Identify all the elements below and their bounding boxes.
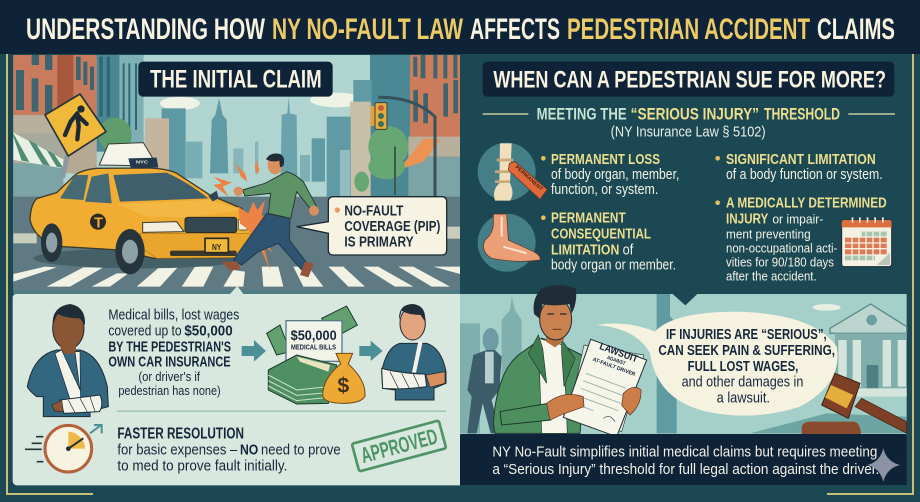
icon: pedestrian crossing sign xyxy=(45,94,106,178)
text: permanent consequential limitation: LIMITATION xyxy=(551,242,619,258)
illustration: yellow taxi xyxy=(30,143,253,274)
illustration: lawsuit document: AGAINST xyxy=(606,355,627,367)
title bar: PEDESTRIAN ACCIDENT xyxy=(567,13,810,46)
text: medically determined injury xyxy=(715,196,887,284)
text: medically determined injury: or impair- xyxy=(772,211,823,226)
text: permanent loss: function, or system. xyxy=(551,182,658,198)
illustration: recovered person xyxy=(382,304,446,400)
illustration: yellow taxi: NY xyxy=(212,243,222,252)
trees xyxy=(98,118,408,195)
text: permanent consequential limitation: PERMANENT xyxy=(551,211,626,227)
panel: no-fault benefits xyxy=(13,286,460,485)
illustration: yellow taxi: T xyxy=(94,215,103,231)
speech bubble with damages text: CAN SEEK PAIN & SUFFERING, xyxy=(658,343,835,359)
illustration: lawsuit document: LAWSUIT xyxy=(598,341,639,365)
text: coverage details xyxy=(108,306,239,398)
text: coverage details: BY THE PEDESTRIAN'S xyxy=(108,338,231,355)
illustration: background figure xyxy=(467,328,502,433)
subheading: serious injury threshold: “SERIOUS INJURY” xyxy=(631,104,759,123)
speech bubble with damages text: and other damages in xyxy=(682,375,803,391)
text: medically determined injury: ment preventing xyxy=(726,226,811,241)
illustration: lawsuit document xyxy=(547,339,647,437)
text: coverage details: OWN CAR INSURANCE xyxy=(108,354,231,371)
text: permanent loss xyxy=(541,152,679,198)
title bar: UNDERSTANDING HOW xyxy=(26,13,265,46)
text: medically determined injury: non-occupational acti- xyxy=(726,240,837,255)
text: coverage details: $50,000 xyxy=(184,322,233,339)
icon: sparkle xyxy=(867,448,900,482)
illustration: lawsuit document: AT-FAULT DRIVER xyxy=(592,357,636,378)
stamp: approved: APPROVED xyxy=(358,424,440,468)
text: medically determined injury: vities for 90/180 days xyxy=(726,255,834,270)
crosswalk stripes xyxy=(13,267,460,287)
subheading: serious injury threshold: THRESHOLD xyxy=(764,104,840,123)
panel: lawsuit scene and summary xyxy=(460,285,907,485)
right buildings xyxy=(327,55,460,233)
text: medically determined injury: A MEDICALLY DETERMINED xyxy=(726,196,887,212)
callout: no-fault coverage: COVERAGE (PIP) xyxy=(344,219,440,235)
speech bubble with damages text: IF INJURIES ARE “SERIOUS”, xyxy=(666,327,827,343)
heading: the initial claim: THE INITIAL CLAIM xyxy=(150,65,322,93)
text: permanent loss: PERMANENT LOSS xyxy=(551,152,660,168)
arrow: to recovery xyxy=(359,341,383,361)
icon: spine with permanent tag xyxy=(478,143,547,201)
awnings xyxy=(13,133,441,170)
subheading: serious injury threshold: MEETING THE xyxy=(537,104,627,123)
subheading: serious injury threshold: (NY Insurance Law § 5102) xyxy=(611,125,766,141)
street xyxy=(13,197,460,290)
text: permanent loss: of body organ, member, xyxy=(551,167,679,183)
callout: no-fault coverage: IS PRIMARY xyxy=(344,235,414,251)
text: permanent consequential limitation xyxy=(541,211,676,273)
summary bar: NY No-Fault simplifies initial medical claims but requires meeting xyxy=(492,445,877,461)
callout: no-fault coverage: NO-FAULT xyxy=(344,203,403,219)
callout: no-fault coverage xyxy=(297,197,447,255)
illustration: yellow taxi: NYC xyxy=(136,160,148,165)
traffic light xyxy=(371,97,435,197)
text: coverage details: covered up to xyxy=(108,322,182,339)
text: coverage details: (or driver's if xyxy=(138,369,200,384)
icon: cash, bills and money bag: MEDICAL BILLS xyxy=(291,342,336,351)
icon: impact burst xyxy=(213,160,273,270)
panel: the initial claim street scene xyxy=(13,55,460,290)
text: faster resolution xyxy=(117,425,341,475)
illustration: struck pedestrian xyxy=(222,153,319,277)
illustration: injured person with sling xyxy=(27,304,108,417)
left panel frame xyxy=(6,54,93,495)
text: medically determined injury: INJURY xyxy=(726,211,768,227)
text: significant limitation: SIGNIFICANT LIMITATION xyxy=(726,152,876,168)
cityscape background xyxy=(460,294,907,433)
text: permanent consequential limitation: CONSEQUENTIAL xyxy=(551,227,651,243)
text: permanent consequential limitation: body organ or member. xyxy=(551,257,676,273)
text: coverage details: Medical bills, lost wages xyxy=(108,306,239,323)
text: faster resolution: for basic expenses – xyxy=(117,441,238,458)
stamp: approved xyxy=(352,421,446,471)
icon: injured foot xyxy=(478,214,540,272)
title bar: NY NO-FAULT LAW xyxy=(272,13,463,46)
left buildings xyxy=(13,55,143,233)
right panel frame xyxy=(827,54,914,495)
summary bar xyxy=(460,434,907,485)
text: significant limitation: of a body function or system. xyxy=(726,167,883,183)
summary bar: a “Serious Injury” threshold for full legal action against the driver. xyxy=(492,462,879,478)
text: faster resolution: need to prove xyxy=(261,441,341,458)
illustration: courthouse xyxy=(830,304,907,397)
divider xyxy=(117,411,446,412)
text: faster resolution: NO xyxy=(240,441,259,458)
text: coverage details: pedestrian has none) xyxy=(118,383,221,398)
icon: cash, bills and money bag: $ xyxy=(337,374,349,398)
clouds xyxy=(160,93,363,110)
speech bubble with damages text: a lawsuit. xyxy=(717,390,770,406)
icon: gavel xyxy=(802,373,907,434)
text: faster resolution: FASTER RESOLUTION xyxy=(117,425,244,442)
text: faster resolution: to med to prove fault initially. xyxy=(117,458,287,475)
triangle notch xyxy=(673,294,697,305)
illustration: man holding lawsuit xyxy=(493,285,585,433)
arrow: to payment xyxy=(242,340,266,362)
speech bubble with damages text xyxy=(597,312,838,416)
panel: when can a pedestrian sue for more xyxy=(478,62,895,284)
icon: spine with permanent tag: PERMANENT xyxy=(514,164,544,192)
heading: the initial claim xyxy=(138,62,333,97)
title bar xyxy=(0,0,920,54)
title bar: AFFECTS xyxy=(470,13,560,46)
icon: calendar xyxy=(842,217,892,267)
midground towers xyxy=(145,97,325,182)
subheading: serious injury threshold xyxy=(483,104,895,141)
speech bubble with damages text: FULL LOST WAGES, xyxy=(688,359,798,375)
text: medically determined injury: after the accident. xyxy=(726,269,817,284)
text: permanent consequential limitation: of xyxy=(623,242,633,258)
icon: cash, bills and money bag: $50,000 xyxy=(291,327,337,343)
icon: cash, bills and money bag xyxy=(267,306,365,404)
icon: stopwatch xyxy=(25,425,102,472)
text: significant limitation xyxy=(715,152,883,183)
